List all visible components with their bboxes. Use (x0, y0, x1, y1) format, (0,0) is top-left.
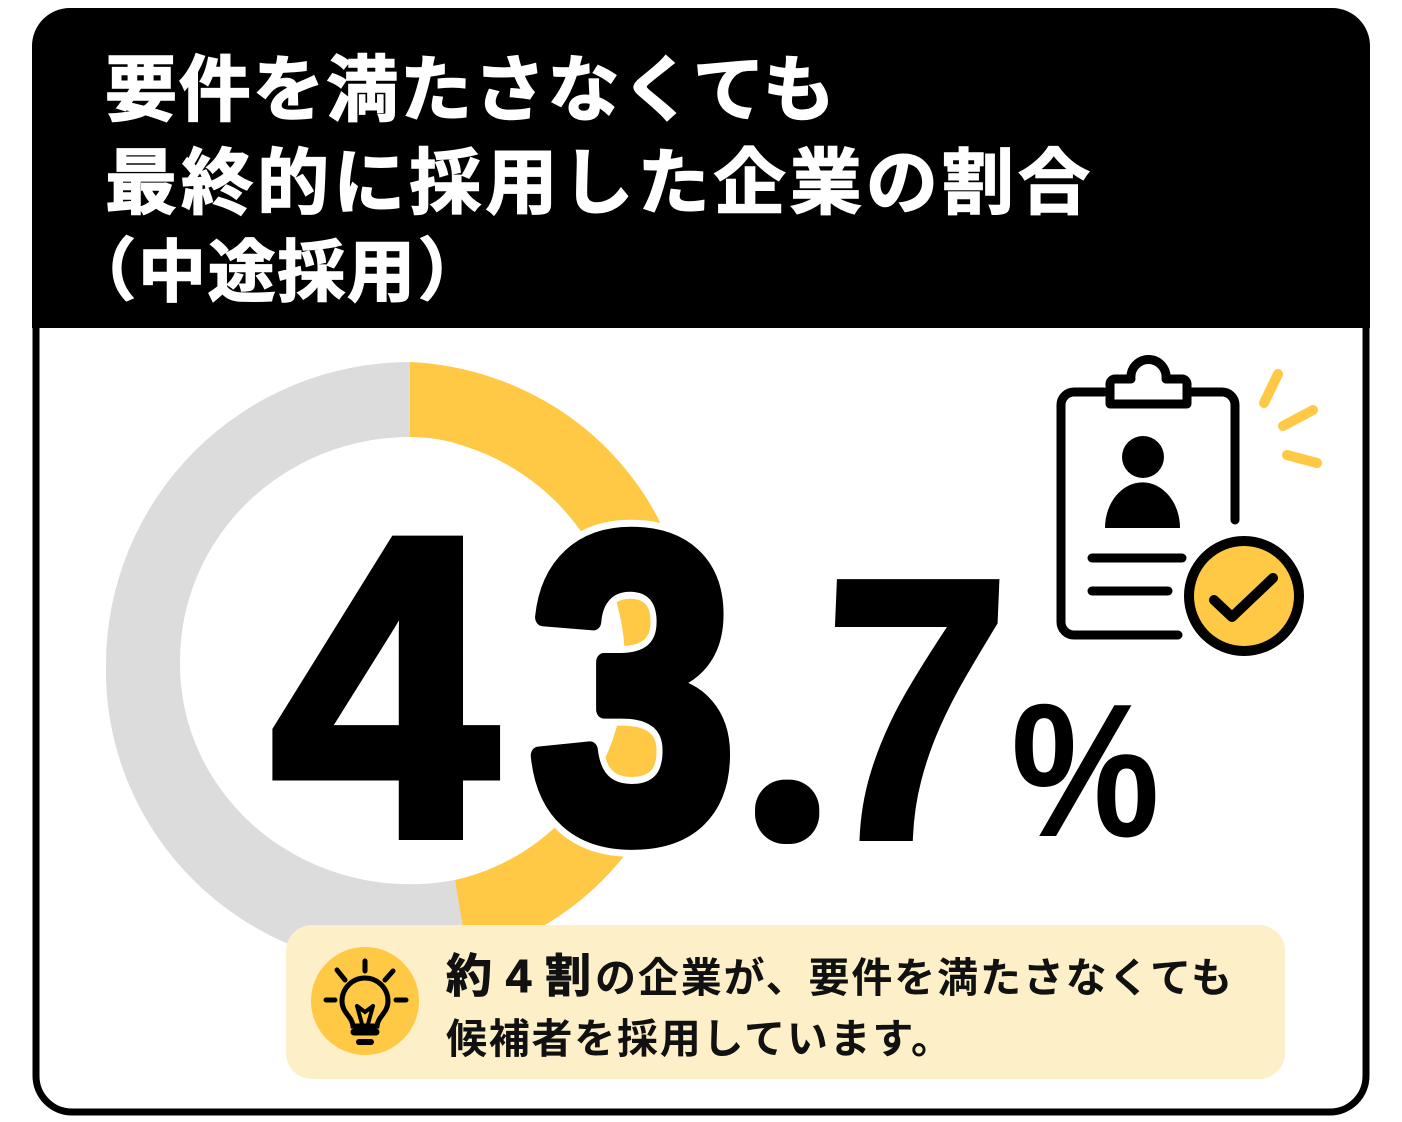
title: ） (418, 233, 486, 309)
clipboard board (1061, 392, 1235, 635)
icon: clipboard with person and check (1061, 360, 1317, 651)
header band (32, 8, 1370, 328)
icon: light bulb (311, 947, 419, 1055)
callout text: の企業が、要件を満たさなくても (595, 955, 1232, 1001)
callout text: 候補者を採用しています。 (446, 1016, 952, 1062)
big number 43.7%: . (783, 788, 791, 821)
clipboard clip (1110, 360, 1187, 404)
donut value segment (410, 362, 681, 945)
donut chart (106, 362, 681, 969)
title: 最終的に採用した企業の割合 (105, 144, 1090, 224)
title (68, 51, 1090, 311)
big number 43.7%: 3 (530, 447, 736, 927)
person (1105, 436, 1180, 528)
callout text (446, 950, 1232, 1062)
sparkles (1264, 374, 1317, 463)
callout text: 約4割 (446, 950, 591, 1002)
big number 43.7%: 4 (272, 450, 499, 924)
big number 43.7%: 7 (811, 502, 1015, 918)
donut remainder segment (106, 362, 470, 969)
big number 43.7%: 3 (530, 447, 736, 927)
title: （ (68, 233, 136, 309)
title: 中途採用 (138, 235, 415, 311)
check badge (1189, 541, 1299, 651)
big number 43.7% (272, 447, 1160, 927)
big number 43.7%: % (1011, 664, 1160, 876)
title: 要件を満たさなくても (105, 51, 835, 131)
text lines (1092, 558, 1182, 591)
callout (286, 925, 1285, 1079)
